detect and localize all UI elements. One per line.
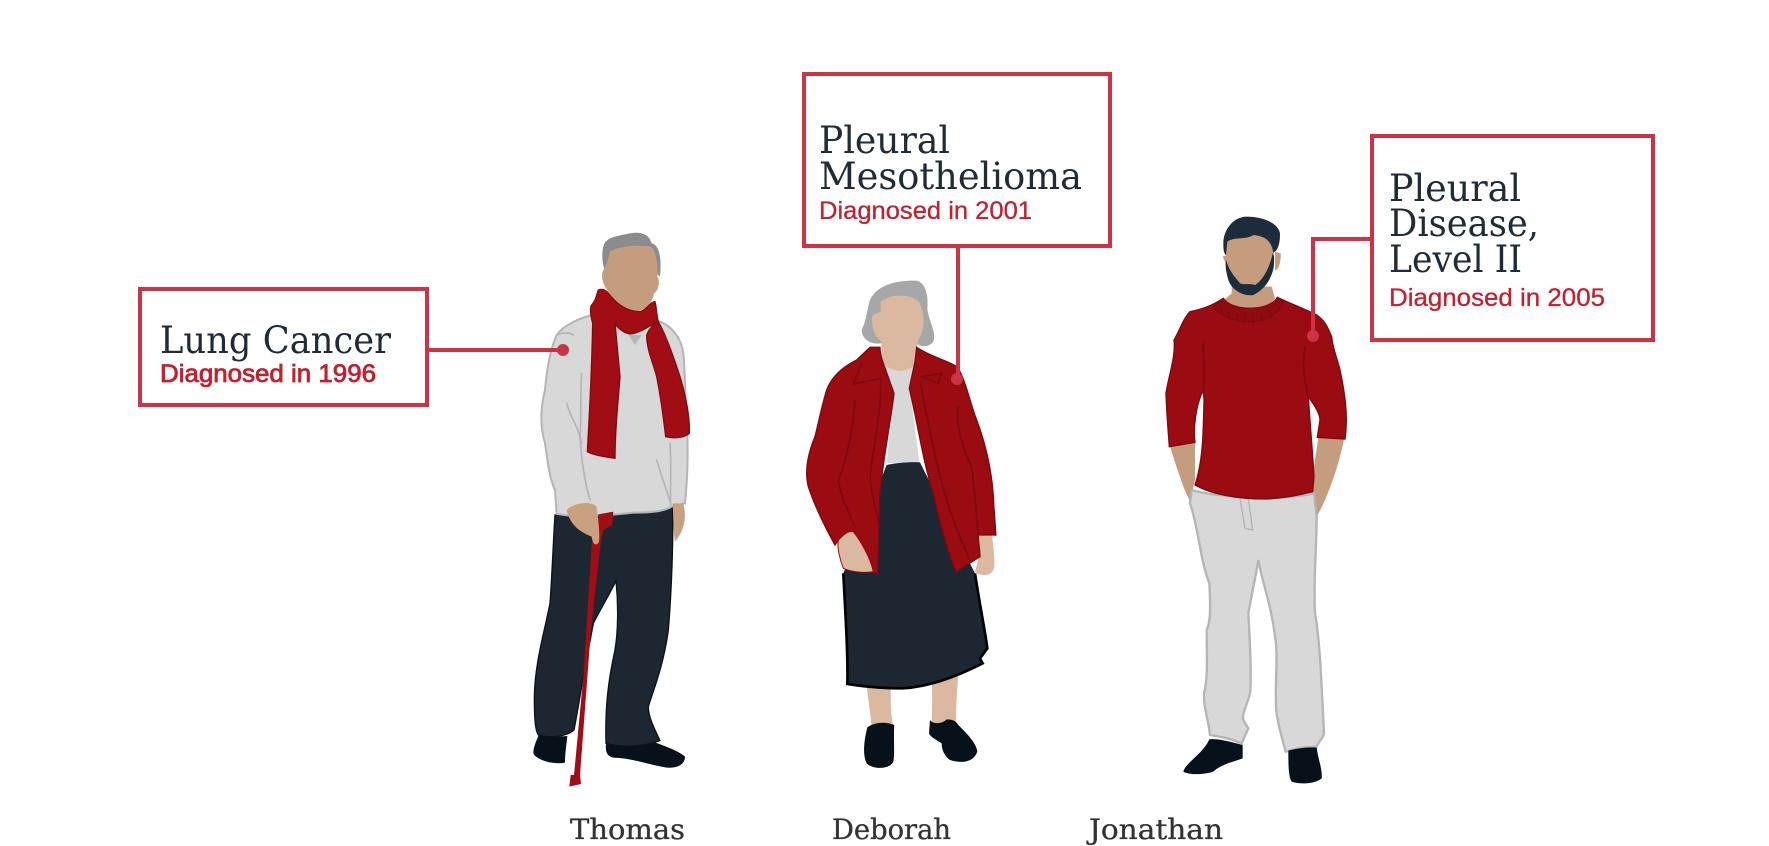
- Thomas cane: [569, 512, 613, 787]
- Jonathan trousers: [1190, 490, 1324, 752]
- callout subtitle: Diagnosed in 2001: [819, 197, 1032, 225]
- callout connector: [956, 246, 960, 378]
- Deborah face and neck: [872, 296, 924, 372]
- Jonathan hair: [1223, 217, 1280, 255]
- Deborah jacket left: [807, 347, 894, 575]
- Deborah legs: [867, 675, 958, 727]
- sweater collar ribs: [1220, 305, 1280, 324]
- Jonathan face: [1226, 229, 1274, 291]
- callout title: Lung Cancer: [160, 319, 391, 362]
- figure: Thomas: [533, 233, 689, 787]
- Jonathan shoes: [1183, 739, 1322, 783]
- Thomas sweater folds: [557, 333, 671, 505]
- callout title: Pleural: [819, 119, 950, 162]
- callout box: [1372, 136, 1653, 340]
- Thomas collar: [628, 335, 642, 345]
- callout: Lung Cancer: [140, 289, 569, 405]
- Deborah shirt: [883, 363, 919, 463]
- callout title line 3: Level II: [1389, 238, 1522, 281]
- Thomas shoes: [533, 734, 685, 768]
- Thomas right hand: [673, 503, 685, 542]
- callout connector: [1313, 239, 1372, 336]
- Jonathan sweater: [1166, 297, 1346, 499]
- name: Deborah: Deborah: [832, 813, 951, 846]
- sweater body: [1166, 297, 1346, 499]
- callout box: [140, 289, 427, 405]
- Thomas face: [602, 246, 659, 312]
- Deborah jacket folds: [838, 363, 996, 562]
- callout connector: [428, 348, 563, 352]
- callout dot: [557, 344, 569, 356]
- sweater folds: [1203, 343, 1308, 397]
- Jonathan beard: [1226, 253, 1274, 295]
- Jonathan neck and ears: [1223, 252, 1281, 310]
- sweater collar: [1213, 297, 1284, 322]
- Deborah jacket right: [909, 347, 996, 572]
- Jonathan drawstring: [1240, 498, 1253, 530]
- name: Thomas: Thomas: [570, 813, 685, 846]
- figure: Jonathan: [1170, 217, 1344, 517]
- Deborah skirt: [843, 462, 987, 688]
- callout subtitle: Diagnosed in 1996: [160, 360, 376, 388]
- callout dot: [951, 373, 963, 385]
- figure: Deborah: [807, 281, 996, 768]
- Jonathan arms: [1170, 437, 1344, 517]
- Deborah skirt hem: [843, 573, 987, 688]
- Thomas sweater: [541, 315, 688, 516]
- name: Jonathan: Jonathan: [1086, 813, 1223, 846]
- callout subtitle: Diagnosed in 2005: [1389, 284, 1605, 312]
- Thomas left hand: [567, 503, 599, 544]
- callout title: Pleural: [1389, 167, 1521, 210]
- Jonathan trousers and shoes: [1183, 490, 1324, 783]
- Thomas scarf: [587, 289, 658, 458]
- Thomas trousers: [534, 507, 673, 746]
- callout dot: [1307, 330, 1319, 342]
- callout: Pleural Disease: [1307, 136, 1653, 342]
- Deborah shoes: [864, 719, 977, 768]
- callout box: [804, 74, 1110, 246]
- Thomas scarf tail: [647, 322, 689, 438]
- Deborah left hand: [838, 531, 873, 572]
- callout title line 2: Mesothelioma: [819, 155, 1082, 198]
- callout title line 2: Disease,: [1389, 202, 1539, 245]
- Deborah hair: [862, 281, 934, 346]
- Deborah right hand: [975, 535, 994, 575]
- callout: Pleural Mesothelioma: [804, 74, 1110, 385]
- Thomas hair: [602, 233, 661, 277]
